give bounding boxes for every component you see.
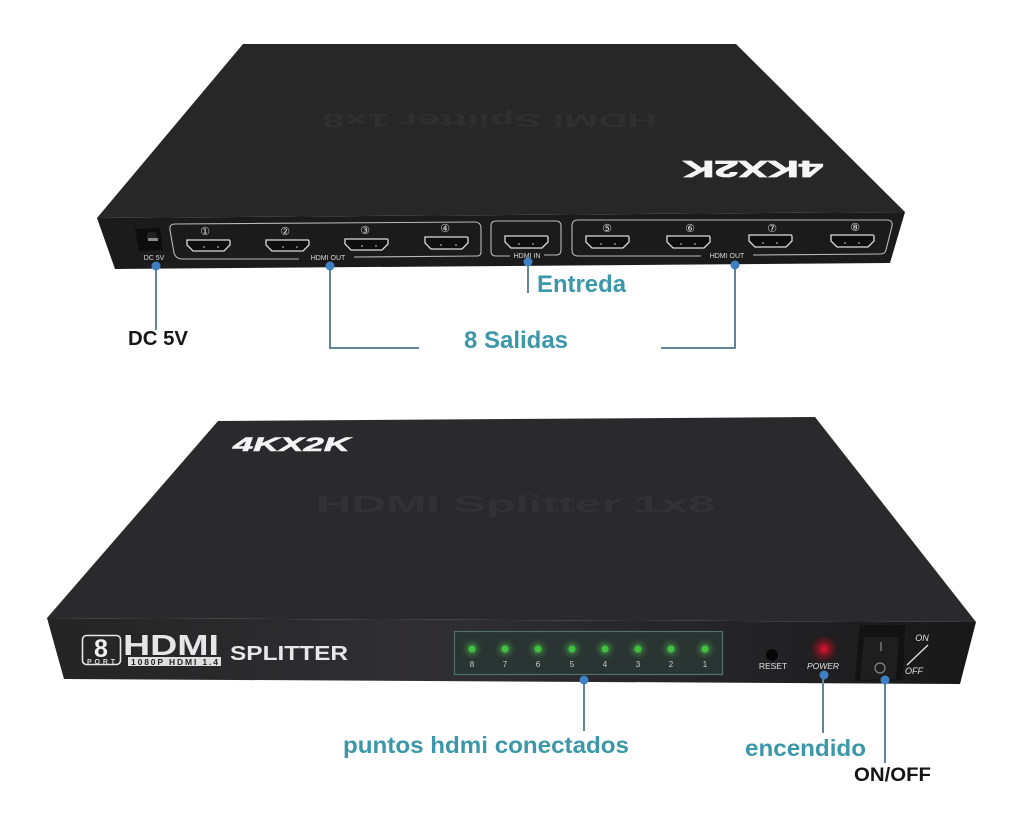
logo: HDMI: 1080P HDMI 1.4 — [131, 657, 218, 667]
HDMI OUT group 5-8: ⑦ — [767, 222, 777, 235]
top face — [97, 44, 905, 218]
callout: puntos hdmi conectados — [343, 676, 629, 758]
HDMI IN group — [491, 221, 561, 260]
device: front view of splitter — [47, 417, 976, 684]
top face — [47, 417, 976, 622]
callout: 8 Salidas — [326, 260, 740, 354]
callout: ON/OFF — [854, 676, 931, 786]
callout: ON/OFF: ON/OFF — [854, 765, 931, 786]
4KX2K badge: 4KX2K — [231, 435, 352, 456]
device: rear view of splitter — [97, 44, 905, 269]
logo: HDMI: HDMI — [123, 630, 219, 662]
HDMI IN group: HDMI IN — [514, 253, 540, 260]
HDMI OUT group 1-4: ③ — [360, 224, 370, 237]
logo: 8 port: 8 — [94, 635, 108, 663]
callout: DC 5V: DC 5V — [128, 328, 189, 350]
front panel — [47, 618, 976, 684]
4KX2K badge: 4KX2K — [682, 156, 823, 182]
callout: DC 5V — [128, 262, 189, 350]
callout: encendido: encendido — [745, 735, 866, 761]
callout: Entreda: Entreda — [537, 271, 627, 298]
DC jack: DC 5V — [144, 255, 165, 262]
HDMI OUT group 5-8: ⑥ — [685, 222, 695, 235]
LED panel: 6 — [536, 660, 541, 669]
LED panel: 4 — [603, 660, 608, 669]
reset button: RESET — [759, 661, 787, 671]
SPLITTER label: SPLITTER — [230, 643, 349, 665]
logo: 8 port: PORT — [87, 659, 116, 666]
embossed product name: HDMI Splitter 1x8 — [322, 109, 657, 130]
LED panel: 7 — [503, 660, 508, 669]
HDMI OUT group 1-4: ② — [280, 225, 290, 238]
HDMI OUT group 1-4: HDMI OUT — [311, 255, 346, 262]
on/off switch: OFF — [905, 666, 923, 676]
callout: Entreda — [524, 258, 627, 298]
power indicator — [807, 634, 839, 671]
LED panel: 8 — [470, 660, 475, 669]
HDMI OUT group 1-4: ④ — [440, 222, 450, 235]
power indicator: POWER — [807, 661, 839, 671]
on/off switch: ON — [915, 633, 929, 643]
HDMI OUT group 5-8: ⑧ — [850, 221, 860, 234]
on/off switch — [855, 625, 929, 681]
logo: 8 port — [82, 635, 120, 666]
LED panel: 3 — [636, 660, 641, 669]
HDMI OUT group 5-8: HDMI OUT — [710, 253, 745, 260]
DC jack — [135, 228, 165, 262]
callout: encendido — [745, 670, 866, 761]
HDMI OUT group 1-4: ① — [200, 225, 210, 238]
LED panel: 2 — [669, 660, 674, 669]
HDMI OUT group 5-8 — [572, 220, 892, 260]
reset button — [759, 649, 787, 671]
LED panel — [454, 632, 722, 674]
logo: HDMI — [123, 630, 221, 667]
embossed product name: HDMI Splitter 1x8 — [316, 491, 715, 517]
callout: 8 Salidas: 8 Salidas — [464, 327, 568, 354]
front panel — [97, 212, 905, 269]
LED panel: 5 — [570, 660, 575, 669]
HDMI OUT group 5-8: ⑤ — [602, 222, 612, 235]
HDMI OUT group 1-4 — [170, 222, 481, 262]
callout: puntos hdmi conectados: puntos hdmi conectados — [343, 732, 629, 758]
LED panel: 1 — [703, 660, 708, 669]
